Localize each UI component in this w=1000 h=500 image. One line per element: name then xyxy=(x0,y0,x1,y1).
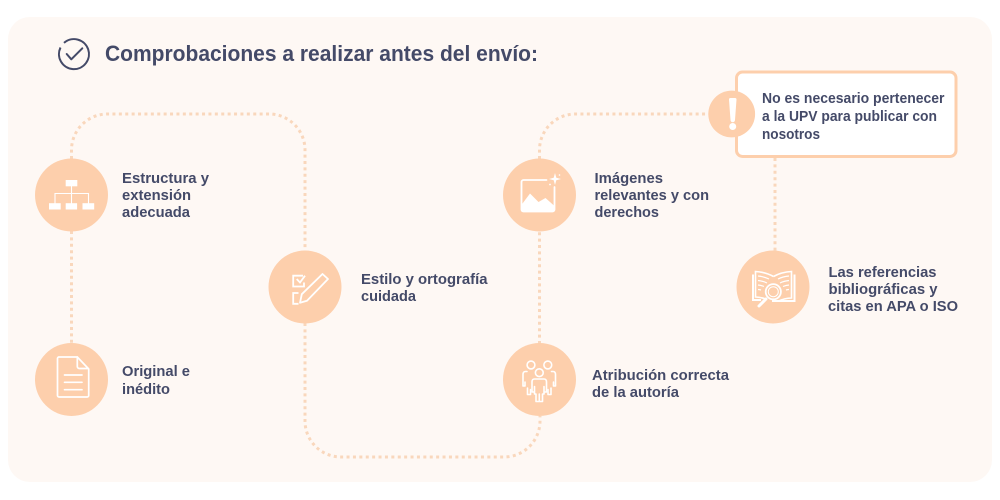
label xyxy=(122,171,209,221)
label: citas en APA o ISO xyxy=(828,299,958,315)
label: Las referencias xyxy=(828,265,936,281)
icon: people xyxy=(503,343,576,416)
step: atribución de autoría xyxy=(503,343,730,416)
callout text: No es necesario pertenecer xyxy=(762,91,945,107)
icon: exclamation xyxy=(708,91,755,137)
icon: open book with magnifier xyxy=(736,250,810,324)
label: Estilo y ortografía xyxy=(361,272,488,288)
label: Atribución correcta xyxy=(592,368,730,384)
header icon: check circle xyxy=(59,39,89,69)
icon: checklist and pencil xyxy=(268,250,342,324)
label: bibliográficas y xyxy=(828,282,938,298)
label: Original e xyxy=(122,364,190,380)
callout: no es necesario pertenecer a la UPV xyxy=(708,72,956,156)
callout text: nosotros xyxy=(762,127,820,143)
icon: org chart xyxy=(35,158,108,232)
label: extensión xyxy=(122,188,191,204)
label: de la autoría xyxy=(592,385,680,401)
label xyxy=(361,272,488,305)
label: Imágenes xyxy=(594,171,663,187)
label xyxy=(592,368,730,401)
label: inédito xyxy=(122,382,170,398)
label xyxy=(594,171,709,221)
step: estilo y ortografía xyxy=(268,250,488,324)
step: referencias bibliográficas xyxy=(736,250,958,324)
icon: document xyxy=(35,343,108,416)
dotted connector path xyxy=(72,114,775,457)
label: derechos xyxy=(594,205,659,221)
step: estructura y extensión xyxy=(35,158,209,232)
title: Comprobaciones a realizar antes del envío: xyxy=(105,41,538,66)
label: adecuada xyxy=(122,205,191,221)
label: Estructura y xyxy=(122,171,209,187)
label: cuidada xyxy=(361,289,417,305)
step: imágenes relevantes xyxy=(503,158,709,232)
label xyxy=(828,265,958,315)
label xyxy=(122,364,190,398)
icon: image with sparkle xyxy=(503,158,576,232)
step: original e inédito xyxy=(35,343,190,416)
callout text xyxy=(762,91,945,143)
callout text: a la UPV para publicar con xyxy=(762,109,937,125)
label: relevantes y con xyxy=(594,188,709,204)
